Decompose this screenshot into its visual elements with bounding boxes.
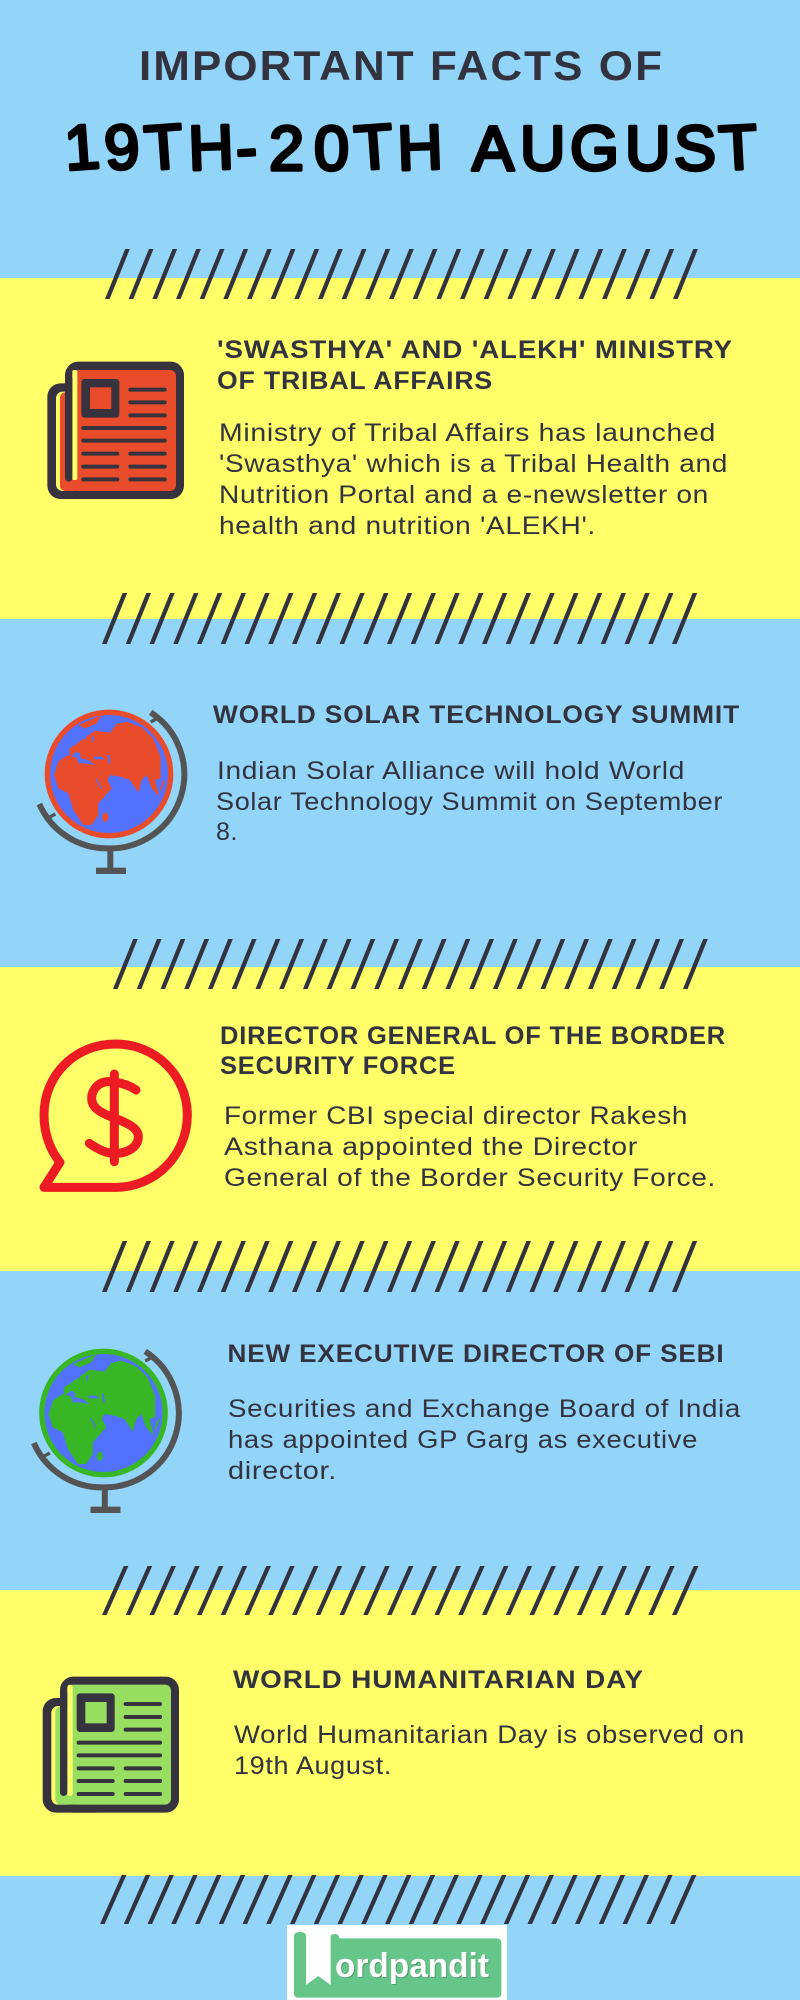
text: new executive director of sebi: Securities and Exchange Board of India (228, 1395, 741, 1423)
divider: hatch 2 (112, 593, 687, 644)
text: director general bsf (224, 1102, 716, 1192)
icon: red newspaper (47, 362, 184, 499)
heading: swasthya and alekh (217, 336, 733, 395)
divider: hatch 3 (123, 939, 698, 989)
icon: green globe (34, 1351, 179, 1513)
text: world solar technology summit: 8. (216, 818, 238, 846)
text: world solar technology summit: Solar Technology Summit on September (216, 788, 723, 816)
text: new executive director of sebi (228, 1395, 741, 1485)
panel: new executive director of sebi (0, 1271, 800, 1590)
text: world humanitarian day: World Humanitarian Day is observed on (234, 1721, 745, 1749)
text: world solar technology summit: Indian Solar Alliance will hold World (217, 757, 685, 785)
icon: green newspaper (43, 1677, 179, 1813)
heading: swasthya and alekh: 'SWASTHYA' AND 'ALEKH' MINISTRY (217, 336, 733, 364)
title: important facts of: IMPORTANT FACTS OF (139, 42, 664, 89)
heading: director general bsf: DIRECTOR GENERAL OF THE BORDER (220, 1022, 726, 1050)
panel: header band (0, 0, 800, 278)
heading: director general bsf: SECURITY FORCE (220, 1052, 456, 1080)
heading: director general bsf (220, 1022, 726, 1080)
text: world solar technology summit (216, 757, 723, 846)
heading: new executive director of sebi: NEW EXECUTIVE DIRECTOR OF SEBI (228, 1340, 724, 1368)
panel: world humanitarian day (0, 1590, 800, 1876)
panel: footer band (0, 1876, 800, 2000)
text: new executive director of sebi: has appointed GP Garg as executive (228, 1426, 698, 1454)
logo: wordpandit (287, 1925, 507, 2000)
text: swasthya and alekh: Ministry of Tribal Affairs has launched (219, 419, 716, 447)
text: director general bsf: Former CBI special director Rakesh (224, 1102, 688, 1130)
divider: hatch 1 (115, 249, 688, 299)
text: director general bsf: General of the Border Security Force. (224, 1164, 716, 1192)
text: director general bsf: Asthana appointed the Director (224, 1133, 638, 1161)
title: date: 19TH-20TH AUGUST (62, 111, 759, 184)
heading: world humanitarian day: WORLD HUMANITARIAN DAY (233, 1666, 644, 1694)
icon: dollar speech bubble (44, 1044, 187, 1187)
panel: world solar technology summit (0, 619, 800, 967)
panel: director general bsf (0, 967, 800, 1271)
divider: hatch 6 (111, 1875, 686, 1924)
heading: world solar technology summit: WORLD SOLAR TECHNOLOGY SUMMIT (213, 701, 740, 729)
divider: hatch 5 (113, 1566, 688, 1615)
icon: red globe (39, 712, 184, 874)
text: swasthya and alekh: Nutrition Portal and a e-newsletter on (219, 481, 709, 509)
text: world humanitarian day: 19th August. (234, 1752, 392, 1780)
text: swasthya and alekh (219, 419, 728, 540)
text: swasthya and alekh: 'Swasthya' which is a Tribal Health and (219, 450, 728, 478)
panel: swasthya and alekh (0, 278, 800, 619)
text: world humanitarian day (234, 1721, 745, 1780)
logo: wordpandit: ordpandit (335, 1947, 489, 1985)
text: new executive director of sebi: director. (228, 1457, 337, 1485)
divider: hatch 4 (112, 1241, 687, 1292)
text: swasthya and alekh: health and nutrition 'ALEKH'. (219, 512, 596, 540)
heading: swasthya and alekh: OF TRIBAL AFFAIRS (217, 367, 493, 395)
